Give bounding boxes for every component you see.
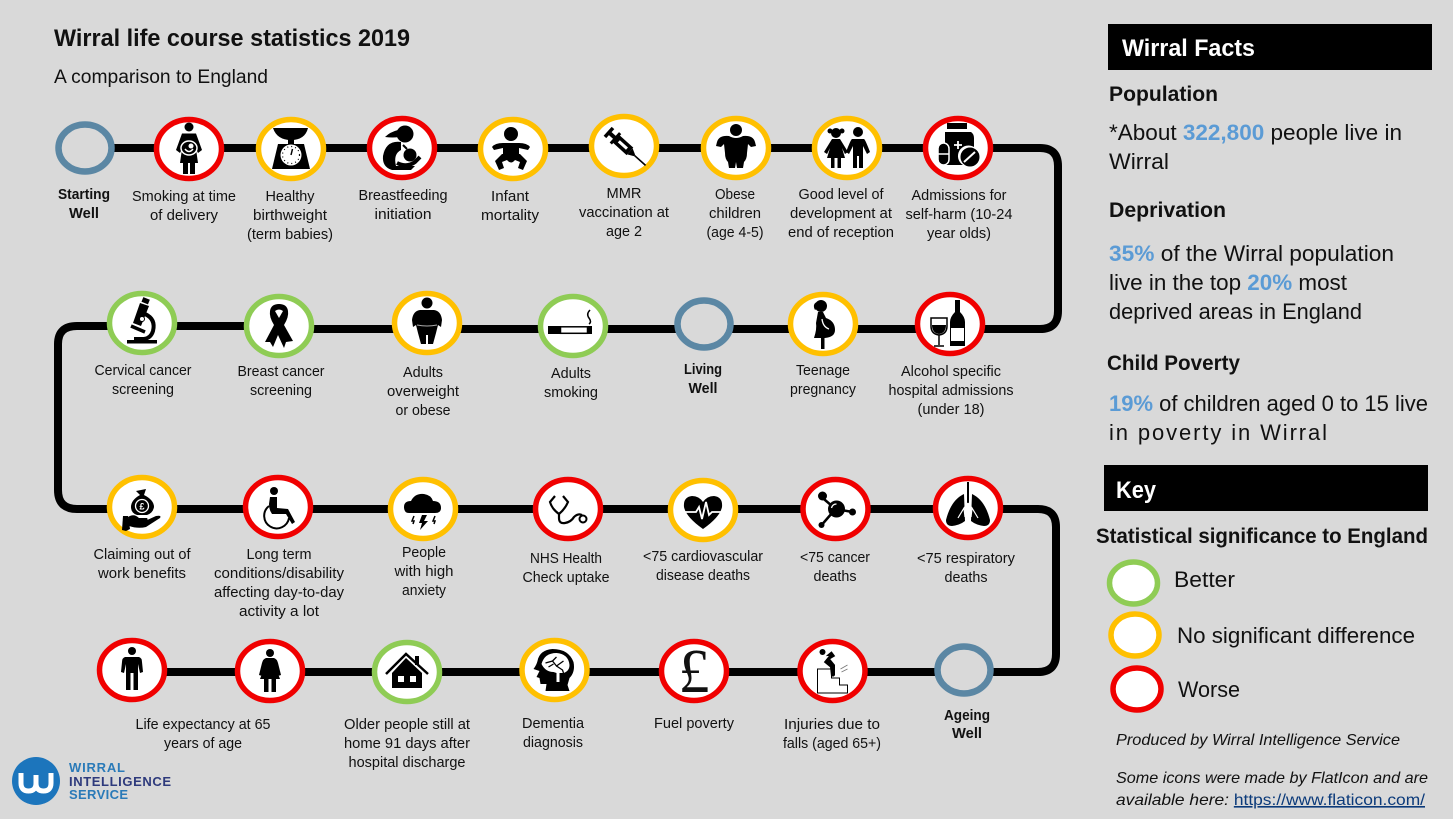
- station: Dementia diagnosis: [522, 640, 587, 751]
- key: Worse: [1178, 677, 1240, 702]
- credits: available here: https://www.flaticon.com/: [1116, 792, 1426, 809]
- label: Fuel poverty: [654, 716, 735, 732]
- icon: wheelchair user: [246, 478, 310, 536]
- station: Adults overweight or obese: [387, 294, 460, 419]
- label: [238, 364, 325, 399]
- label: Injuries due to: [784, 717, 880, 733]
- key: Better: [1174, 567, 1235, 592]
- label: [132, 189, 236, 224]
- label: [706, 187, 764, 241]
- label: Breast cancer: [238, 364, 325, 380]
- label: vaccination at: [579, 205, 669, 221]
- icon: cigarette: [540, 296, 606, 356]
- stage marker: Ageing Well: Well: [952, 726, 982, 742]
- label: (age 4-5): [706, 225, 764, 241]
- station: Alcohol specific hospital admissions: [888, 294, 1014, 418]
- label: self-harm (10-24: [906, 207, 1012, 223]
- icon: stethoscope: [536, 480, 600, 538]
- label: Healthy: [266, 189, 315, 205]
- label: Long term: [246, 547, 312, 563]
- logo: Wirral Intelligence Service: WIRRAL: [69, 760, 125, 775]
- label: Teenage: [796, 363, 850, 379]
- label: screening: [112, 382, 174, 398]
- label: Older people still at: [344, 717, 470, 733]
- station: Infant mortality: [480, 120, 546, 224]
- fact block: Population: *About 322,800 people live in: [1109, 120, 1402, 145]
- label: [906, 188, 1012, 242]
- logo: Wirral Intelligence Service: [12, 757, 171, 805]
- station: Cervical cancer screening: [94, 294, 192, 398]
- label: Admissions for: [912, 188, 1007, 204]
- label: hospital discharge: [348, 755, 466, 771]
- icon: syringe: [592, 116, 656, 176]
- label: disease deaths: [656, 568, 750, 584]
- heading bar: Key: [1104, 465, 1428, 511]
- icon: pills and bottle: [926, 118, 990, 178]
- icon: mother breastfeeding: [370, 118, 434, 178]
- label: anxiety: [402, 583, 447, 599]
- label: [94, 547, 191, 582]
- label: falls (aged 65+): [783, 736, 881, 752]
- station: Healthy birthweight: [247, 120, 333, 243]
- station: under 75 respiratory deaths: [917, 478, 1016, 586]
- label: mortality: [481, 208, 540, 224]
- label: [481, 189, 540, 224]
- heading bar: Key: Key: [1116, 477, 1157, 504]
- station: People with high anxiety: [390, 480, 456, 599]
- title: Wirral life course statistics 2019: [54, 25, 410, 52]
- stage marker: Ageing Well: [938, 646, 990, 742]
- label: or obese: [396, 403, 450, 419]
- fact block: Child Poverty: Child Poverty: [1107, 352, 1240, 375]
- label: development at: [790, 206, 892, 222]
- label: [788, 187, 894, 241]
- icon: overweight adult: [394, 294, 460, 352]
- stage marker: Starting Well: [58, 124, 112, 222]
- fact block: Deprivation: live in the top 20% most: [1109, 270, 1347, 295]
- label: [522, 716, 585, 751]
- stage marker: Living Well: Living: [684, 362, 722, 378]
- label: [643, 549, 763, 584]
- icon: wine glass and bottle: [918, 294, 982, 354]
- label: Adults: [551, 366, 591, 382]
- label: diagnosis: [523, 735, 583, 751]
- label: of delivery: [150, 208, 219, 224]
- label: [579, 186, 669, 240]
- label: home 91 days after: [344, 736, 470, 752]
- label: [387, 365, 459, 419]
- icon: woman: [238, 642, 302, 700]
- label: work benefits: [97, 566, 186, 582]
- label: [94, 363, 192, 398]
- station: Fuel poverty: [654, 638, 735, 732]
- label: activity a lot: [239, 604, 319, 620]
- label: [800, 550, 870, 585]
- credits: Some icons were made by FlatIcon and are: [1116, 770, 1428, 787]
- label: [214, 547, 345, 620]
- label: pregnancy: [790, 382, 857, 398]
- label: Cervical cancer: [94, 363, 192, 379]
- label: NHS Health: [530, 551, 602, 567]
- label: (term babies): [247, 227, 333, 243]
- label: [783, 717, 881, 752]
- fact block: Population: Wirral: [1109, 149, 1169, 174]
- label: year olds): [927, 226, 991, 242]
- label: People: [402, 545, 446, 561]
- icon: two children holding hands: [814, 118, 880, 178]
- label: [544, 366, 598, 401]
- icon: pregnant silhouette: [790, 294, 856, 354]
- icon: awareness ribbon: [246, 296, 312, 356]
- label: <75 respiratory: [917, 551, 1016, 567]
- label: [136, 717, 270, 752]
- key: Statistical significance to England: [1096, 525, 1428, 548]
- station: Life expectancy at 65 (female): [238, 642, 302, 700]
- label: Good level of: [798, 187, 884, 203]
- label: [522, 551, 610, 586]
- logo: Wirral Intelligence Service: INTELLIGENCE: [69, 774, 171, 789]
- credits: [1116, 732, 1428, 809]
- label: Smoking at time: [132, 189, 236, 205]
- icon: microscope: [110, 294, 174, 352]
- icon: person falling on stairs: [800, 642, 865, 700]
- station: Admissions for self-harm: [906, 118, 1012, 242]
- label: deaths: [944, 570, 988, 586]
- label: end of reception: [788, 225, 894, 241]
- credits: Produced by Wirral Intelligence Service: [1116, 732, 1400, 749]
- key: [1096, 525, 1428, 710]
- station: Life expectancy at 65 (male): [100, 640, 270, 752]
- icon: weighing scales: [258, 120, 324, 178]
- label: Alcohol specific: [901, 364, 1001, 380]
- fact block: Child Poverty: [1107, 352, 1428, 445]
- label: Adults: [403, 365, 443, 381]
- station: Long term conditions/disability: [214, 478, 345, 620]
- label: birthweight: [253, 208, 327, 224]
- label: [888, 364, 1014, 418]
- fact block: Child Poverty: 19% of children aged 0 to 15 live: [1109, 391, 1428, 416]
- heading bar: Wirral Facts: [1108, 24, 1432, 70]
- label: affecting day-to-day: [214, 585, 345, 601]
- station: Obese children: [704, 118, 768, 241]
- label: age 2: [606, 224, 642, 240]
- key: No significant difference: [1177, 623, 1415, 648]
- station: Adults smoking: [540, 296, 606, 401]
- label: [393, 545, 454, 599]
- fact block: Deprivation: 35% of the Wirral population: [1109, 241, 1394, 266]
- stage marker: Starting Well: Starting: [58, 187, 110, 203]
- icon: pregnant woman: [156, 120, 222, 178]
- label: [917, 551, 1016, 586]
- station: under 75 cancer deaths: [800, 480, 870, 585]
- station: MMR vaccination: [579, 116, 669, 240]
- label: [247, 189, 333, 243]
- label: Check uptake: [522, 570, 610, 586]
- station: Claiming out of work benefits: [94, 478, 191, 582]
- station: Breastfeeding initiation: [358, 118, 448, 223]
- fact block: Population: Population: [1109, 83, 1218, 106]
- icon: storm cloud: [390, 480, 456, 538]
- label: screening: [250, 383, 312, 399]
- station: under 75 cardiovascular disease deaths: [643, 480, 763, 584]
- label: overweight: [387, 384, 459, 400]
- icon: heart with pulse: [670, 480, 736, 540]
- label: [344, 717, 470, 771]
- icon: pound sign: £: [678, 638, 710, 706]
- label: Obese: [715, 187, 755, 203]
- label: with high: [393, 564, 454, 580]
- label: [790, 363, 857, 398]
- life course path line: [58, 148, 1058, 672]
- label: children: [709, 206, 761, 222]
- fact block: Deprivation: Deprivation: [1109, 199, 1226, 222]
- icon: baby: [480, 120, 546, 178]
- station: Teenage pregnancy: [790, 294, 857, 398]
- fact block: Deprivation: [1109, 199, 1394, 324]
- stage marker: Living Well: Well: [688, 381, 718, 397]
- label: Infant: [491, 189, 529, 205]
- label: (under 18): [918, 402, 984, 418]
- label: MMR: [606, 186, 642, 202]
- label: smoking: [544, 385, 598, 401]
- fact block: Deprivation: deprived areas in England: [1109, 299, 1362, 324]
- label: [358, 188, 448, 223]
- label: <75 cancer: [800, 550, 870, 566]
- icon: house: [374, 642, 440, 702]
- label: initiation: [374, 207, 432, 223]
- fact block: Population: [1109, 83, 1402, 174]
- stage marker: Living Well: [678, 300, 730, 397]
- logo: Wirral Intelligence Service: SERVICE: [69, 787, 128, 802]
- label: Breastfeeding: [358, 188, 448, 204]
- fact block: Child Poverty: in poverty in Wirral: [1109, 420, 1327, 445]
- station: Smoking at time of delivery: [132, 120, 236, 224]
- stage marker: Ageing Well: Ageing: [944, 708, 990, 724]
- label: years of age: [164, 736, 242, 752]
- label: deaths: [814, 569, 856, 585]
- station: Good level of development: [788, 118, 894, 241]
- subtitle: A comparison to England: [54, 67, 268, 88]
- label: Dementia: [522, 716, 585, 732]
- icon: money bag on hand: £: [139, 502, 145, 512]
- icon: man: [100, 640, 164, 700]
- label: <75 cardiovascular: [643, 549, 763, 565]
- icon: cancer cell: [803, 480, 868, 538]
- label: hospital admissions: [888, 383, 1014, 399]
- icon: head with brain: [522, 640, 587, 700]
- label: Claiming out of: [94, 547, 191, 563]
- station: Older people still at home: [344, 642, 470, 771]
- label: Life expectancy at 65: [136, 717, 270, 733]
- stage marker: Starting Well: Well: [69, 206, 99, 222]
- heading bar: Wirral Facts: Wirral Facts: [1122, 35, 1255, 62]
- icon: lungs: [936, 478, 1000, 538]
- station: Injuries due to falls: [783, 642, 881, 752]
- station: NHS Health Check uptake: [522, 480, 610, 586]
- icon: obese child: [704, 118, 768, 178]
- station: Breast cancer screening: [238, 296, 325, 399]
- label: conditions/disability: [214, 566, 345, 582]
